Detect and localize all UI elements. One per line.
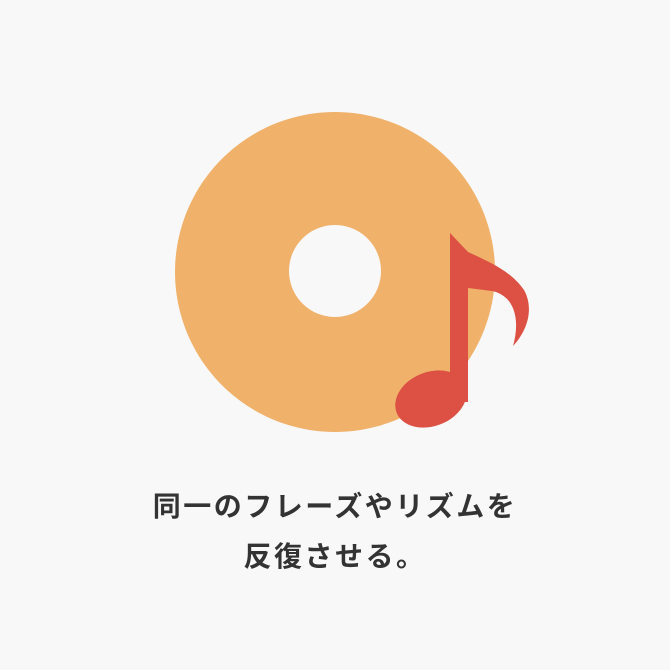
icon: music note — [387, 233, 529, 438]
text: caption line 1: 同一のフレーズやリズムを — [153, 491, 517, 522]
text: caption line 2: 反復させる。 — [243, 541, 426, 572]
icon: disc — [175, 112, 495, 432]
